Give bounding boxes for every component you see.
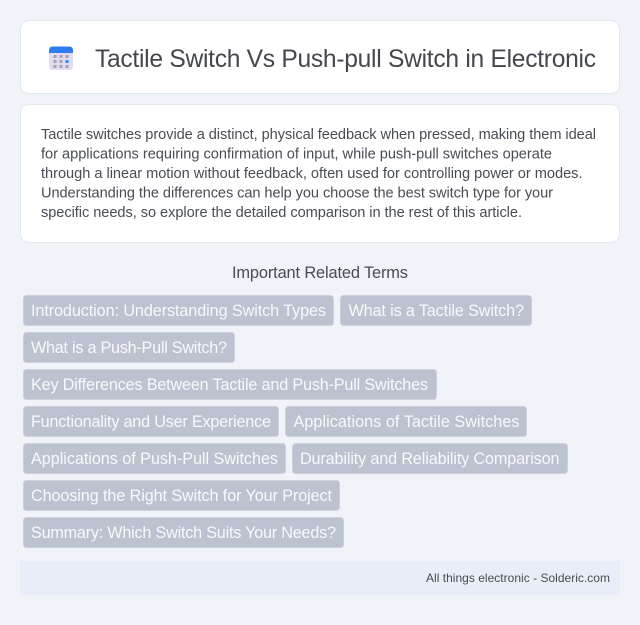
intro text: Tactile switches provide a distinct, physical feedback when pressed, making them ideal [41,127,596,143]
intro text: for applications requiring confirmation of input, while push-pull switches operate [41,146,552,162]
tag: Applications of Push-Pull Switches [31,450,278,468]
tag: Choosing the Right Switch for Your Project [31,487,332,505]
tag [24,296,334,326]
panel: header [20,20,620,94]
panel: intro paragraph [20,104,620,242]
tag [286,406,526,436]
tag [340,296,532,326]
footer [20,561,620,595]
tag: Key Differences Between Tactile and Push-Pull Switches [31,376,428,394]
tag: Applications of Tactile Switches [294,413,520,431]
tag [24,518,344,548]
tag [292,444,568,474]
tag: What is a Push-Pull Switch? [31,339,227,357]
intro text: through a linear motion without feedback, often used for controlling power or modes. [41,166,582,182]
heading: related terms: Important Related Terms [232,264,408,282]
tag: Durability and Reliability Comparison [300,450,560,468]
tag: Introduction: Understanding Switch Types [31,302,326,320]
tag: Summary: Which Switch Suits Your Needs? [31,524,336,542]
title: Tactile Switch Vs Push-pull Switch in Electronic [95,46,596,73]
intro text: Understanding the differences can help you choose the best switch type for your [41,186,553,202]
intro text [41,127,596,221]
related terms tags [24,296,568,548]
tag [24,480,340,510]
tag [24,406,278,436]
tag: What is a Tactile Switch? [348,302,524,320]
tag [24,444,286,474]
tag: Functionality and User Experience [31,413,271,431]
icon: calendar [49,46,73,70]
tag [24,370,436,400]
intro text: specific needs, so explore the detailed comparison in the rest of this article. [41,205,522,221]
footer credit: All things electronic - Solderic.com [426,571,610,585]
tag [24,332,234,362]
